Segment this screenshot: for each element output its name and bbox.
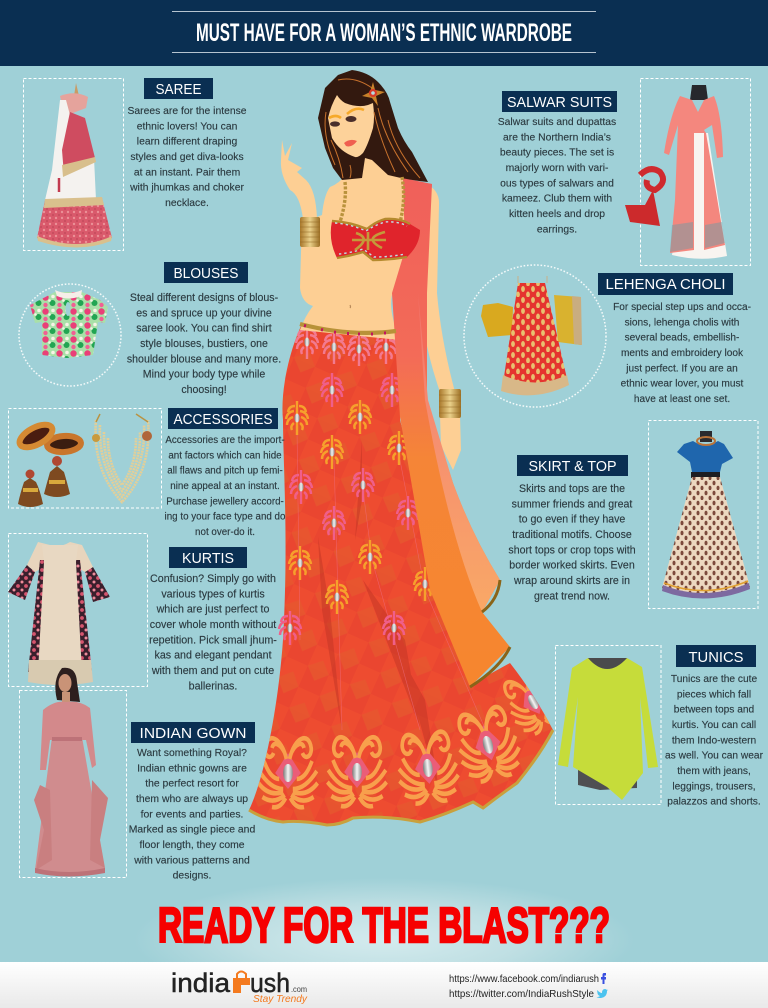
salwar text: ous types of salwars and [500, 178, 614, 189]
blouse [331, 219, 420, 260]
gold chains [340, 177, 404, 222]
accessories text: Accessories are the import- [165, 435, 285, 446]
dupatta back layer [392, 180, 432, 293]
saree heading [144, 78, 213, 99]
blouses text: saree look. You can find shirt [136, 323, 272, 335]
panel: accessories [8, 408, 286, 538]
blouses text: Steal different designs of blous- [130, 292, 279, 304]
icon: facebook [601, 973, 606, 984]
skirt text: short tops or crop tops with [508, 544, 636, 556]
saree text: ethnic lovers! You can [137, 121, 238, 132]
panel: salwar suits [498, 78, 750, 266]
gown text: floor length, they come [139, 840, 245, 851]
lehenga text: ments and embroidery look [621, 348, 744, 359]
gown text: Want something Royal? [137, 748, 247, 759]
earrings [26, 470, 34, 478]
saree text: at an instant. Pair them [134, 167, 240, 178]
panel: indian gown [20, 668, 255, 882]
tunics text: leggings, trousers, [672, 781, 756, 792]
accessories heading: ACCESSORIES [174, 411, 272, 428]
salwar image frame [625, 78, 750, 266]
panel: skirt and top [508, 420, 758, 608]
tunics text: between tops and [674, 705, 755, 716]
skirt text: summer friends and great [512, 498, 632, 510]
accessories text: ing to your face type and do [165, 512, 286, 523]
logo: ush [250, 968, 290, 998]
tunics text: them Indo-western [672, 735, 756, 746]
saree heading: SAREE [156, 81, 202, 98]
gown heading [131, 722, 255, 743]
skirt text: Skirts and tops are the [519, 483, 625, 495]
saree text: with jhumkas and choker [129, 183, 244, 194]
blouses text: choosing! [181, 384, 227, 396]
gown heading: INDIAN GOWN [140, 725, 246, 742]
panel: blouses [19, 262, 281, 396]
kurtis text: kas and elegant pendant [154, 650, 272, 662]
skirt text: to go even if they have [519, 514, 625, 526]
skirt text: border worked skirts. Even [509, 560, 635, 572]
logo: .com [291, 984, 307, 994]
necklace [96, 420, 148, 502]
header band with title [0, 0, 768, 66]
kurtis text: with them and put on cute [151, 665, 274, 677]
blouses text: style blouses, bustiers, one [140, 338, 268, 350]
panel: lehenga choli [464, 265, 751, 407]
skirt text: great trend now. [534, 590, 610, 602]
right hand [440, 416, 461, 470]
footer [0, 962, 768, 1008]
blouses text: Mind your body type while [143, 369, 265, 381]
tunics text: palazzos and shorts. [667, 797, 761, 808]
salwar text: earrings. [537, 224, 577, 235]
hair and face [318, 70, 428, 182]
gown image frame [20, 668, 126, 878]
kurtis heading: KURTIS [182, 550, 234, 567]
lehenga text: sions, lehenga cholis with [625, 317, 739, 328]
skirt heading [517, 455, 628, 476]
salwar text: kitten heels and drop [509, 209, 605, 220]
hair ornament [362, 82, 385, 106]
lehenga heading: LEHENGA CHOLI [606, 276, 726, 293]
tunic image frame [556, 646, 661, 804]
torso and left arm [300, 145, 430, 340]
logo [171, 968, 308, 1005]
salwar text: kameez. Club them with [502, 194, 612, 205]
gown text: the perfect resort for [145, 779, 239, 790]
central illustration: woman in lehenga [249, 70, 569, 825]
right arm [420, 183, 455, 392]
gown text: Indian ethnic gowns are [137, 763, 247, 774]
saree text: learn different draping [137, 137, 237, 148]
gown text: them who are always up [136, 794, 248, 805]
kurtis text: various types of kurtis [161, 588, 265, 600]
gown text: for events and parties. [141, 809, 243, 820]
social links [449, 973, 608, 1000]
waist belt [300, 324, 396, 334]
social links: https://twitter.com/IndiaRushStyle [449, 988, 594, 1000]
tunics text: as well. You can wear [665, 751, 764, 762]
social links: https://www.facebook.com/indiarush [449, 973, 599, 985]
salwar text: beauty pieces. The set is [500, 148, 614, 159]
blouses heading: BLOUSES [174, 265, 238, 282]
skirt text: wrap around skirts are in [513, 575, 630, 587]
lehenga image frame [464, 265, 606, 407]
skirt image frame [648, 420, 758, 608]
tunics text: pieces which fall [677, 689, 751, 700]
blouses heading [164, 262, 248, 283]
saree image frame [24, 78, 124, 250]
kurtis text: cover whole month without [150, 619, 276, 631]
tunics text: Tunics are the cute [671, 674, 757, 685]
lehenga text: have at least one set. [634, 394, 730, 405]
gown text: Marked as single piece and [129, 825, 255, 836]
accessories text: all flaws and pitch up femi- [167, 466, 283, 477]
lehenga text: For special step ups and occa- [613, 302, 751, 313]
accessories text: ant factors which can hide [168, 450, 282, 461]
panel: kurtis [8, 534, 277, 692]
tunics text: them with jeans, [677, 766, 751, 777]
bangles [300, 217, 461, 418]
logo: india [171, 968, 231, 998]
accessories text: not over-do it. [195, 527, 255, 538]
gown text: designs. [173, 871, 211, 882]
lehenga text: just perfect. If you are an [625, 363, 738, 374]
bangles [46, 435, 82, 453]
kurti image frame [8, 534, 148, 686]
kurtis text: which are just perfect to [156, 604, 269, 616]
panel: tunics [556, 645, 764, 808]
salwar text: majorly worn with vari- [506, 163, 608, 174]
lehenga text: ethnic wear lover, you must [621, 379, 744, 390]
red dupatta [640, 169, 663, 190]
tunics heading [676, 645, 756, 667]
kurtis text: repetition. Pick small jhum- [149, 634, 277, 646]
blouses text: es and spruce up your divine [136, 307, 272, 319]
skirt heading: SKIRT & TOP [528, 458, 616, 475]
saree text: necklace. [165, 198, 209, 209]
skirt text: traditional motifs. Choose [512, 529, 632, 541]
salwar text: Salwar suits and dupattas [498, 117, 616, 128]
skirt [249, 325, 569, 825]
salwar heading: SALWAR SUITS [507, 94, 612, 111]
salwar text: are the Northern India’s [503, 132, 611, 143]
lehenga text: several beads, embellish- [625, 333, 739, 344]
icon: twitter [596, 989, 608, 998]
blouse image frame [19, 284, 121, 386]
blouses text: shoulder blouse and many more. [127, 353, 281, 365]
kurtis text: Confusion? Simply go with [150, 573, 276, 585]
left hand [281, 140, 317, 219]
dupatta [392, 178, 510, 687]
saree text: Sarees are for the intense [127, 106, 247, 117]
gown text: with various patterns and [133, 855, 250, 866]
accessories text: nine appeal at an instant. [170, 481, 280, 492]
saree text: styles and get diva-looks [130, 152, 244, 163]
kurtis heading [169, 547, 247, 568]
accessories image frame [8, 408, 162, 508]
logo: r [234, 975, 242, 997]
tunics text: kurtis. You can call [672, 720, 756, 731]
panel: saree [24, 78, 247, 250]
kurtis text: ballerinas. [189, 680, 237, 692]
lehenga heading [598, 273, 733, 295]
logo: Stay Trendy [253, 993, 308, 1005]
tunics heading: TUNICS [688, 649, 744, 666]
accessories text: Purchase jewellery accord- [166, 496, 284, 507]
